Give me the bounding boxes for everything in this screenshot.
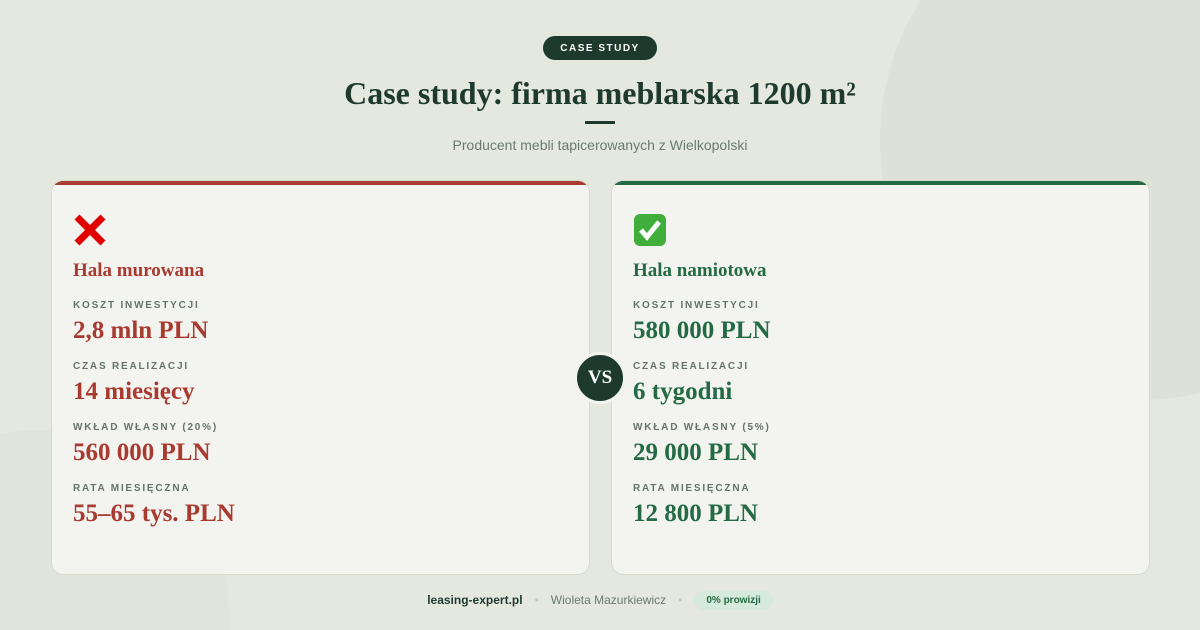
footer: • — [535, 593, 539, 607]
panel: hala namiotowa — [611, 180, 1150, 575]
heading: Hala namiotowa — [633, 260, 767, 281]
panel: hala namiotowa: 6 tygodni — [633, 378, 732, 405]
footer: Wioleta Mazurkiewicz — [551, 593, 666, 607]
footer: leasing-expert.pl — [427, 593, 523, 607]
subtitle: Producent mebli tapicerowanych z Wielkopolski — [453, 137, 747, 153]
vs circle — [574, 352, 626, 404]
panel: hala murowana: 55–65 tys. PLN — [73, 500, 235, 527]
footer: 0% prowizji — [706, 594, 761, 606]
footer: • — [678, 593, 682, 607]
panel: hala murowana: 560 000 PLN — [73, 439, 210, 466]
panel: hala murowana: CZAS REALIZACJI — [73, 361, 189, 372]
panel: hala namiotowa: 12 800 PLN — [633, 500, 758, 527]
vs circle: VS — [588, 367, 612, 388]
badge: CASE STUDY — [560, 43, 640, 54]
panel: hala murowana: 14 miesięcy — [73, 378, 194, 405]
panel: hala namiotowa: 580 000 PLN — [633, 317, 770, 344]
icon: red cross — [74, 214, 106, 246]
panel: hala murowana — [51, 180, 590, 575]
panel: hala murowana: 2,8 mln PLN — [73, 317, 208, 344]
panel: hala murowana: KOSZT INWESTYCJI — [73, 300, 200, 311]
panel: hala murowana: RATA MIESIĘCZNA — [73, 483, 190, 494]
panel: hala namiotowa: CZAS REALIZACJI — [633, 361, 749, 372]
heading: Hala murowana — [73, 260, 204, 281]
panel: hala namiotowa: KOSZT INWESTYCJI — [633, 300, 760, 311]
footer — [427, 591, 773, 610]
icon: green check — [634, 214, 666, 246]
panel: hala namiotowa: RATA MIESIĘCZNA — [633, 483, 750, 494]
badge — [543, 36, 657, 60]
panel: hala murowana: WKŁAD WŁASNY (20%) — [73, 422, 218, 433]
title: Case study: firma meblarska 1200 m² — [344, 75, 856, 111]
panel: hala namiotowa: 29 000 PLN — [633, 439, 758, 466]
panel: hala namiotowa: WKŁAD WŁASNY (5%) — [633, 422, 771, 433]
